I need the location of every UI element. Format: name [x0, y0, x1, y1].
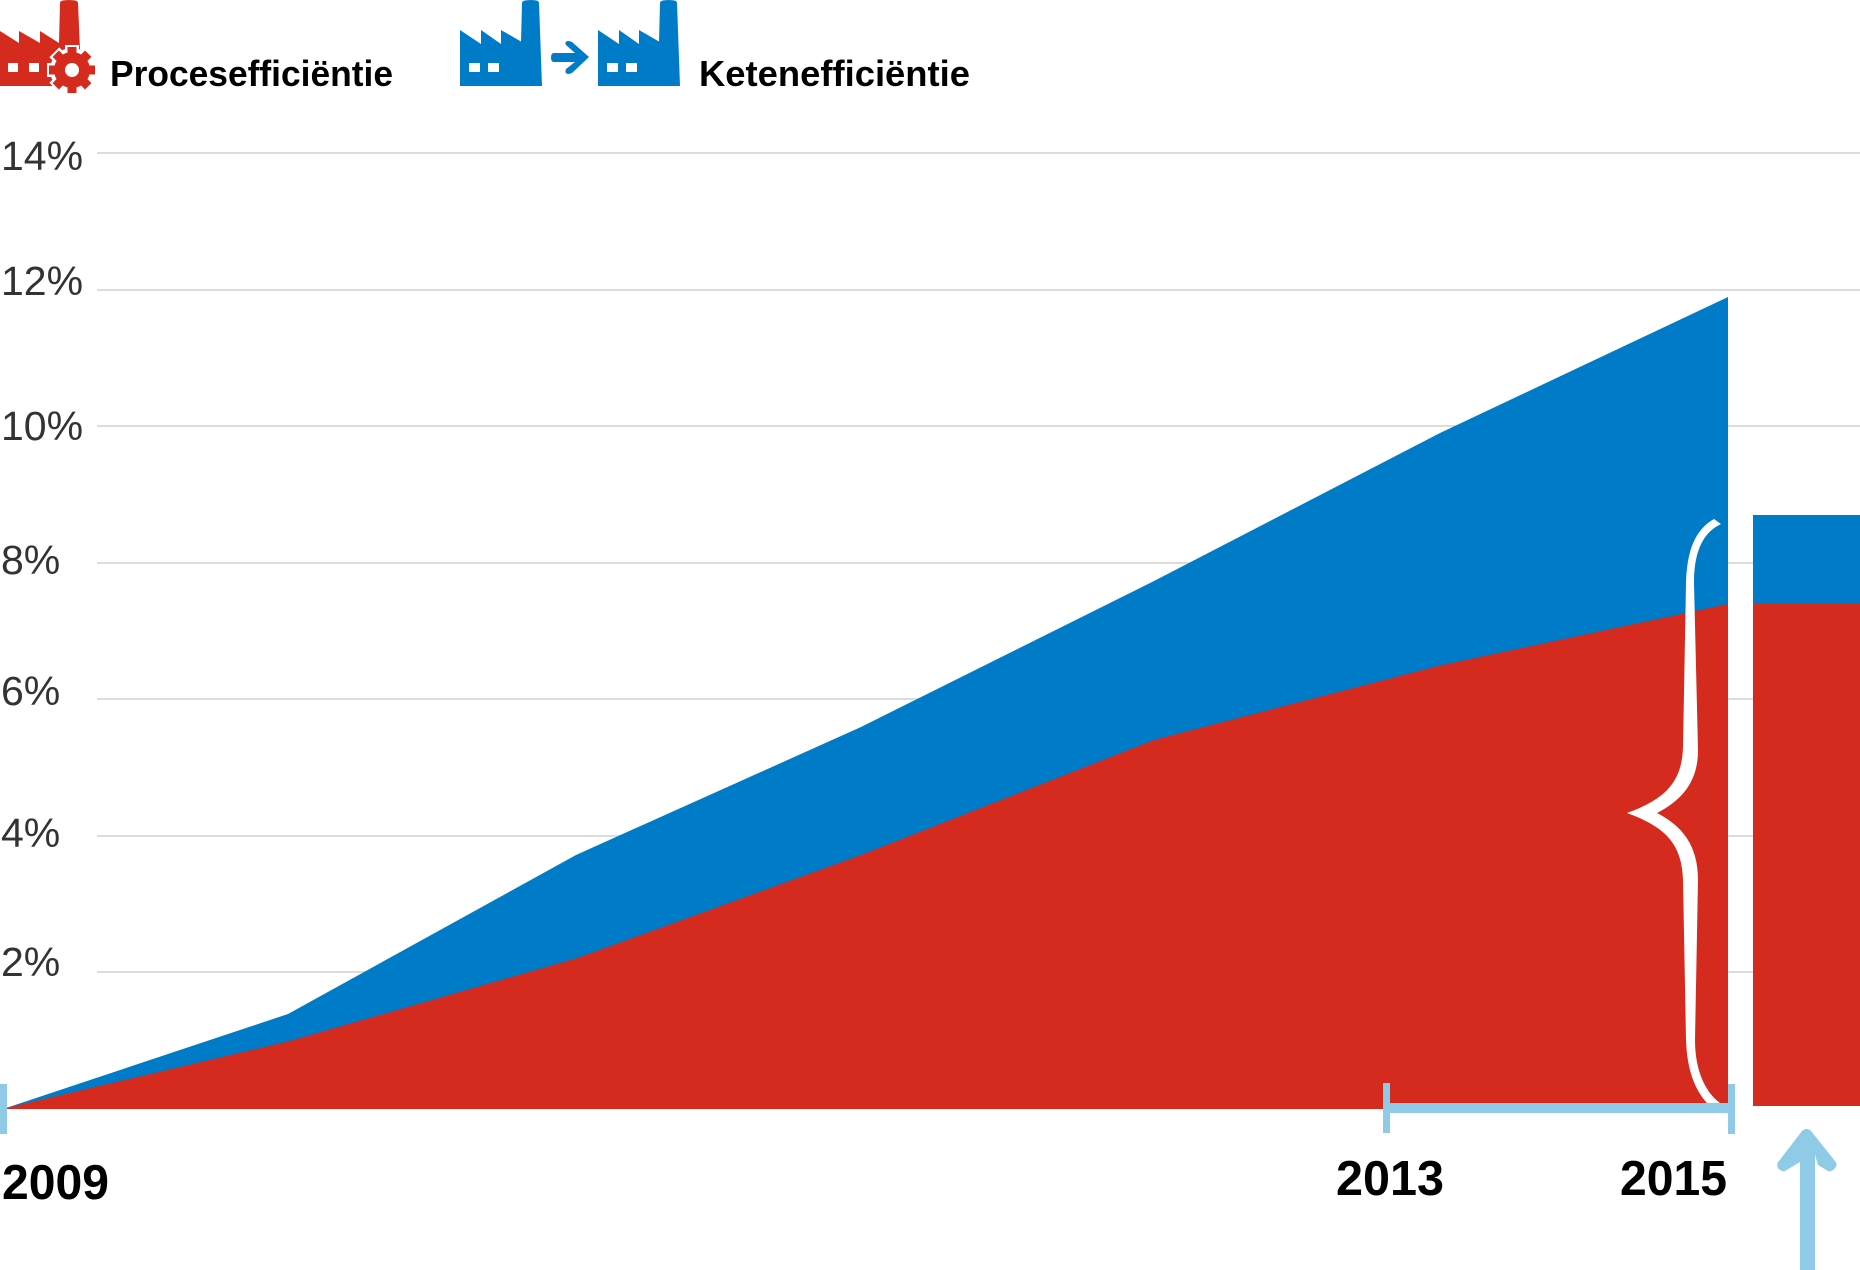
- legend label: Procesefficiëntie: Procesefficiëntie: [110, 53, 393, 94]
- arrow: up to bar: [1777, 1129, 1836, 1270]
- year labels: 2009: [2, 1156, 109, 1210]
- y axis labels: 12%: [1, 258, 83, 304]
- y axis labels: 4%: [1, 810, 60, 856]
- y axis labels: 14%: [1, 133, 83, 179]
- y axis labels: [1, 133, 83, 985]
- legend: procesefficiëntie: [0, 0, 393, 94]
- year labels: 2013: [1336, 1152, 1444, 1206]
- bar segment: procesefficiëntie: [1753, 604, 1860, 1106]
- year labels: 2015: [1620, 1152, 1727, 1206]
- y axis labels: 8%: [1, 537, 60, 583]
- icon: blue factory left: [460, 0, 542, 86]
- curly brace: [1627, 519, 1721, 1103]
- y axis labels: 6%: [1, 668, 60, 714]
- legend label: Ketenefficiëntie: Ketenefficiëntie: [699, 53, 970, 94]
- timeline bracket 2013-2015: [1383, 1083, 1735, 1134]
- area chart: [6, 297, 1728, 1109]
- y axis labels: 10%: [1, 403, 83, 449]
- icon: blue arrow: [551, 41, 589, 74]
- icon: blue factory right: [598, 0, 680, 86]
- timeline 2009 tick: [0, 1084, 7, 1134]
- icon: red factory with gear: [0, 0, 95, 93]
- y axis labels: 2%: [1, 939, 60, 985]
- area: ketenefficiëntie: [6, 297, 1728, 1109]
- bar segment: ketenefficiëntie: [1753, 515, 1860, 605]
- area: procesefficiëntie: [6, 604, 1728, 1109]
- legend: ketenefficiëntie: [460, 0, 970, 94]
- year labels: [2, 1152, 1727, 1210]
- stacked bar: [1753, 515, 1860, 1106]
